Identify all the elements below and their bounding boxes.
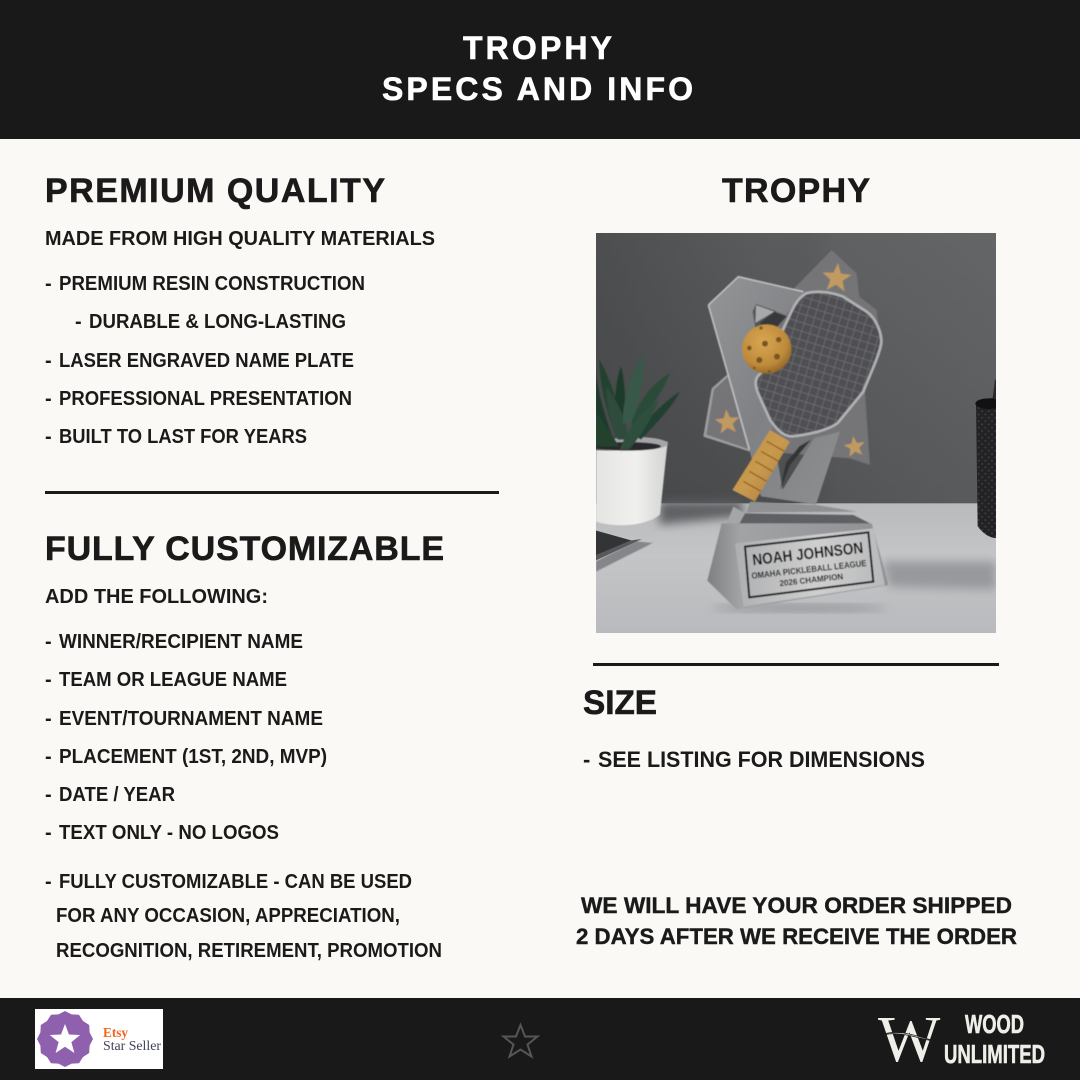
callout: shipping note: WE WILL HAVE YOUR ORDER SHIPPED (581, 893, 1012, 918)
plant (594, 355, 680, 525)
base (707, 523, 888, 609)
text block: materials list: - (75, 311, 82, 333)
laptop (596, 531, 653, 572)
text block: materials list (45, 228, 435, 448)
pen holder (975, 380, 996, 538)
icon: star outline (504, 1025, 538, 1056)
text block: customization list: WINNER/RECIPIENT NAME (59, 631, 303, 653)
text block: customization list: FOR ANY OCCASION, APPRECIATION, (56, 905, 400, 927)
text block: customization list: - (45, 631, 52, 653)
text block: customization list: PLACEMENT (1ST, 2ND, MVP) (59, 746, 327, 768)
icon: etsy star seller badge: Etsy (103, 1026, 128, 1041)
name plate: NOAH JOHNSON (752, 540, 864, 569)
ball (742, 324, 791, 374)
text block: customization list: DATE / YEAR (59, 784, 176, 806)
text block: customization list: - (45, 669, 52, 691)
text block: customization list: TEXT ONLY - NO LOGOS (59, 822, 279, 844)
pot (596, 441, 668, 525)
text block: materials list: DURABLE & LONG-LASTING (89, 311, 346, 333)
name plate: 2026 CHAMPION (779, 571, 844, 588)
text block: customization list: - (45, 708, 52, 730)
base top (728, 501, 870, 524)
text block: materials list: - (45, 273, 52, 295)
title: TROPHY (463, 30, 612, 66)
logo: wood unlimited: W (878, 1003, 941, 1076)
text block: customization list (45, 586, 442, 962)
panel: premium quality (45, 172, 435, 448)
heading: size: SIZE (583, 684, 657, 722)
back plate (703, 250, 878, 465)
heading: premium quality: PREMIUM QUALITY (45, 172, 385, 210)
text block: customization list: - (45, 871, 52, 893)
text block: customization list: - (45, 784, 52, 806)
text block: materials list: BUILT TO LAST FOR YEARS (59, 426, 307, 448)
name plate (735, 528, 885, 607)
text block: materials list: - (45, 350, 52, 372)
text block: customization list: - (45, 822, 52, 844)
text block: customization list: ADD THE FOLLOWING: (45, 586, 268, 608)
name plate: OMAHA PICKLEBALL LEAGUE (751, 558, 867, 581)
text block: materials list: MADE FROM HIGH QUALITY MATERIALS (45, 228, 435, 250)
silver frame (708, 277, 840, 505)
callout: shipping note (576, 893, 1017, 949)
heading: trophy: TROPHY (722, 172, 870, 210)
text block: materials list: - (45, 426, 52, 448)
text block: materials list: LASER ENGRAVED NAME PLATE (59, 350, 354, 372)
trophy (703, 250, 888, 611)
text block: materials list: - (45, 388, 52, 410)
text block: customization list: FULLY CUSTOMIZABLE - CAN BE USED (59, 871, 412, 893)
photo: pickleball trophy (594, 233, 1002, 633)
title (382, 30, 693, 107)
text block: materials list: PREMIUM RESIN CONSTRUCTION (59, 273, 365, 295)
callout: shipping note: 2 DAYS AFTER WE RECEIVE THE ORDER (576, 924, 1017, 949)
logo: wood unlimited: WOOD (965, 1009, 1024, 1039)
stars (714, 262, 866, 457)
heading: fully customizable: FULLY CUSTOMIZABLE (45, 530, 444, 568)
text block: customization list: - (45, 746, 52, 768)
paddle (756, 292, 881, 436)
text block: customization list: EVENT/TOURNAMENT NAME (59, 708, 323, 730)
icon: etsy star seller badge (35, 1009, 163, 1069)
icon: etsy star seller badge: Star Seller (103, 1039, 161, 1054)
text: dimensions note: - (583, 747, 590, 772)
text block: customization list: TEAM OR LEAGUE NAME (59, 669, 287, 691)
text block: customization list: RECOGNITION, RETIREMENT, PROMOTION (56, 940, 442, 962)
text block: materials list: PROFESSIONAL PRESENTATION (59, 388, 352, 410)
panel: fully customizable (45, 530, 444, 962)
logo: wood unlimited (878, 1003, 1045, 1076)
header band (0, 0, 1080, 139)
text: dimensions note: SEE LISTING FOR DIMENSIONS (598, 747, 925, 772)
title: SPECS AND INFO (382, 71, 693, 107)
footer band (0, 998, 1080, 1080)
handle (732, 430, 790, 502)
